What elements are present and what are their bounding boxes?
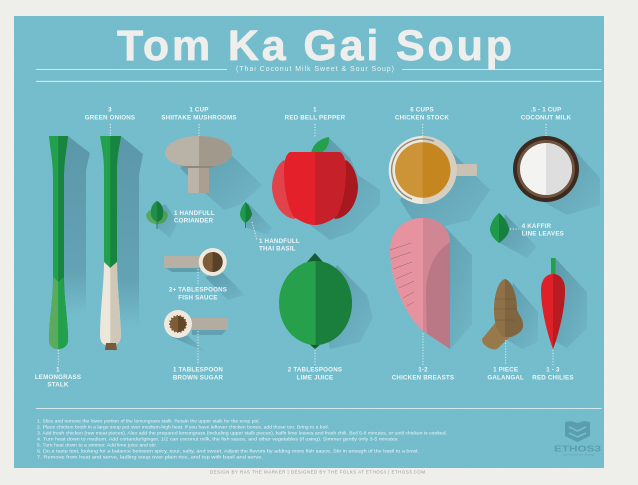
label: green onions: 3 — [108, 106, 112, 114]
instructions: 4. Turn heat down to medium. Add coriander/ginger, 1/2 can coconut milk, the fish sauce, and other vegetables (if using). Simmer gently only 3-5 minutes. — [37, 436, 399, 442]
instructions: 6. Do a taste test, looking for a balance between spicy, sour, salty, and sweet. Adjust the flavors by adding more fish sauce. Stir in enough of the basil to a bowl. — [37, 448, 419, 454]
label: kaffir lime leaves: 4 KAFFIR — [522, 223, 551, 230]
label: coriander: 1 HANDFULL — [174, 210, 215, 217]
label: galangal: GALANGAL — [487, 374, 524, 382]
label: chicken stock: CHICKEN STOCK — [395, 114, 449, 122]
ingredient: red chili — [541, 258, 587, 349]
label: coconut milk: COCONUT MILK — [521, 114, 572, 122]
label: red bell pepper: 1 — [313, 106, 317, 114]
label: red chilies: 1 - 3 — [546, 366, 560, 374]
label: fish sauce: FISH SAUCE — [178, 294, 218, 302]
label: galangal: 1 PIECE — [493, 366, 518, 374]
footer credits: DESIGN BY RAS THE MARKER | DESIGNED BY THE FOLKS AT ETHOS3 | ETHOS3.COM — [210, 470, 425, 474]
instructions: 7. Remove from heat and serve, ladling soup over plain rice, and top with basil and serve. — [37, 454, 263, 460]
ingredient: lime — [279, 253, 373, 349]
label: chicken breasts: 1-2 — [418, 366, 428, 374]
ingredient: coriander — [146, 201, 178, 238]
ingredient: coconut milk — [513, 136, 600, 215]
ingredient: brown sugar spoon — [164, 310, 228, 352]
label: brown sugar: 1 TABLESPOON — [173, 366, 223, 374]
label: lime juice: 2 TABLESPOONS — [288, 366, 342, 374]
ingredient: green onion — [100, 136, 143, 350]
label: shiitake mushrooms: 1 CUP — [189, 106, 209, 114]
ingredient: chicken stock cup — [383, 130, 490, 232]
logo: ethos3 — [554, 421, 602, 456]
instructions: 5. Turn heat down to a simmer. Add lime juice and stir. — [37, 442, 157, 448]
label: lemongrass: 1 — [56, 366, 60, 374]
label: brown sugar: BROWN SUGAR — [173, 374, 223, 382]
label: fish sauce: 2+ TABLESPOONS — [169, 286, 227, 294]
label: lemongrass: LEMONGRASS — [35, 374, 81, 381]
label: lime juice: LIME JUICE — [297, 374, 333, 382]
label: kaffir lime leaves: LINE LEAVES — [522, 230, 564, 238]
ingredient: chicken breast — [390, 218, 472, 352]
ingredient: kaffir lime leaf — [490, 213, 537, 258]
label: chicken breasts: CHICKEN BREASTS — [392, 374, 454, 382]
label: thai basil: 1 HANDFULL — [259, 238, 300, 245]
instructions — [37, 418, 447, 460]
label: lemongrass: STALK — [47, 382, 69, 388]
ingredient: thai basil — [240, 202, 272, 235]
subtitle: (Thai Coconut Milk Sweet & Sour Soup) — [236, 66, 394, 73]
ingredient: shiitake mushroom — [165, 136, 262, 210]
label: red chilies: RED CHILIES — [532, 374, 574, 382]
logo: ethos3: ETHOS3 — [554, 444, 602, 454]
logo: ethos3: presentation design — [563, 452, 595, 456]
label: coriander: CORIANDER — [174, 218, 214, 224]
instructions: 3. Add fresh chicken (raw meat pieces). Also add the prepared lemongrass (including upper stalk pieces), kaffir lime leaves and fresh chili. Boil 5-6 minutes, or until chicken is cooked. — [37, 430, 447, 436]
ingredient: galangal — [482, 279, 538, 349]
ingredient: red bell pepper — [272, 137, 380, 240]
instructions: 2. Place chicken broth in a large soup pot over medium-high heat. If you have leftover chicken bones, add those too. Bring to a boil. — [37, 424, 329, 430]
label: thai basil: THAI BASIL — [259, 246, 296, 252]
ingredient: lemongrass — [49, 136, 90, 349]
label: chicken stock: 6 CUPS — [410, 106, 434, 114]
ingredient: fish sauce spoon — [164, 248, 245, 300]
title: Tom Ka Gai Soup — [117, 22, 512, 70]
label: shiitake mushrooms: SHIITAKE MUSHROOMS — [161, 114, 237, 122]
instructions: 1. Slice and remove the lower portion of the lemongrass stalk. Retain the upper stalk for the soup pot. — [37, 418, 260, 424]
label: green onions: GREEN ONIONS — [85, 114, 135, 122]
label: coconut milk: .5 - 1 CUP — [531, 106, 561, 114]
label: red bell pepper: RED BELL PEPPER — [285, 114, 346, 122]
